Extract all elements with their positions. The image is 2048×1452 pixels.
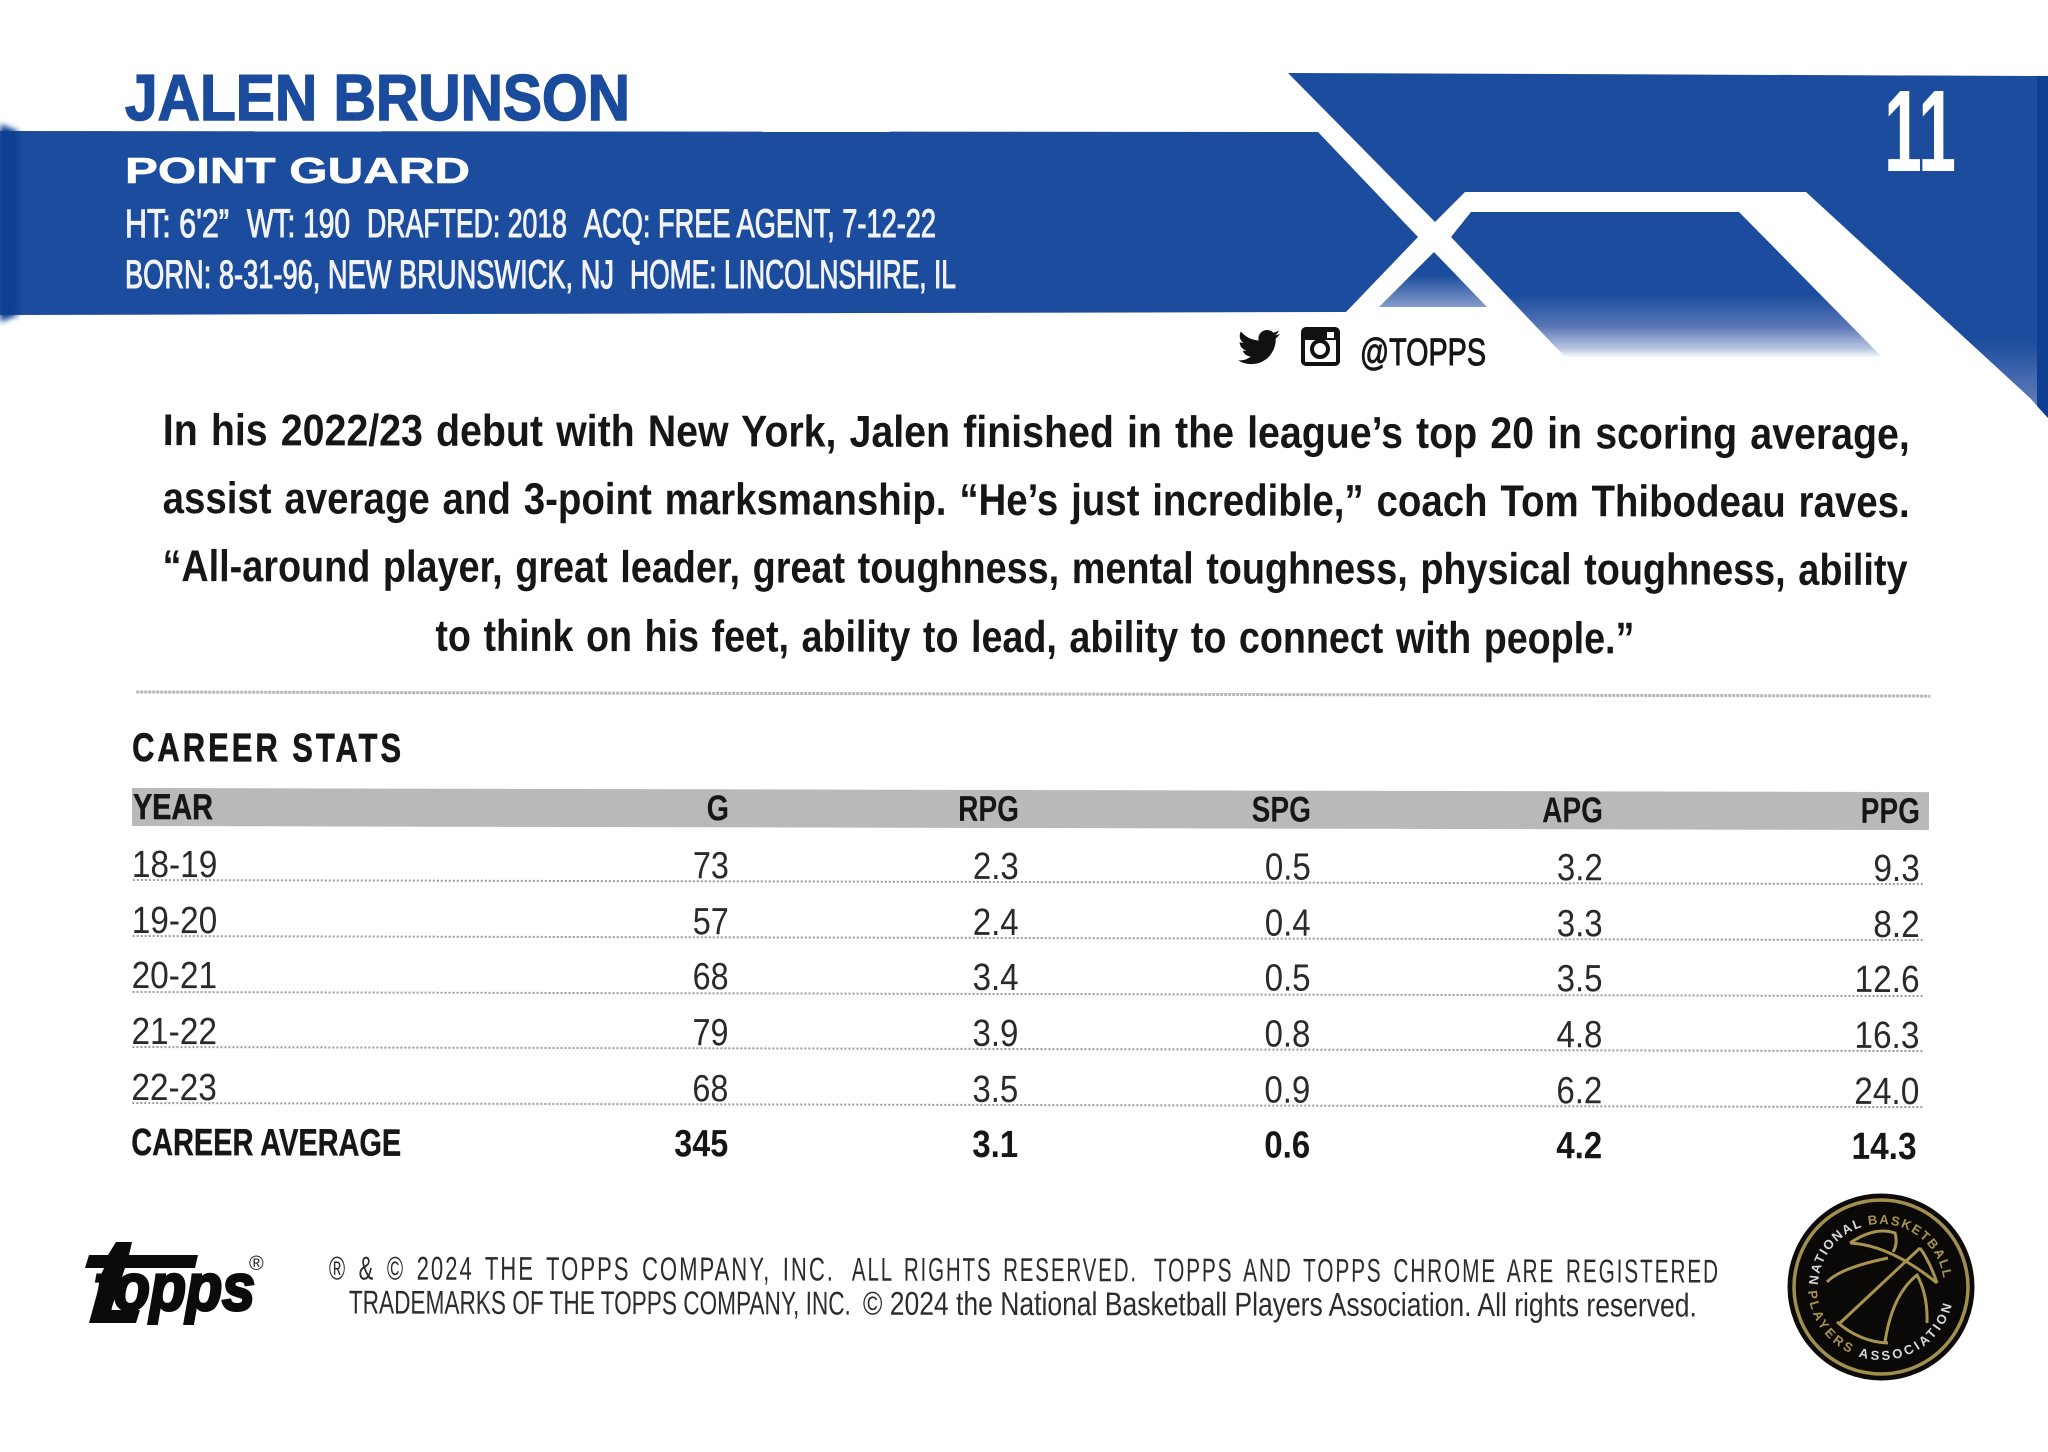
APG column: 4.8: [1556, 1013, 1603, 1056]
legal text: [329, 1249, 1720, 1324]
RPG column: 2.3: [973, 845, 1019, 888]
PPG column: 9.3: [1873, 847, 1920, 890]
G column: 73: [693, 845, 729, 887]
small triangle: [1379, 252, 1487, 307]
basketball lines: [1827, 1231, 1937, 1343]
bio line 1: HT: 6'2”: [125, 202, 229, 246]
stats table: [131, 786, 1929, 1168]
badge lettering: NATIONAL BASKETBALL: [1809, 1215, 1952, 1284]
logo: t letter bar, stem and foot: [85, 1242, 198, 1323]
legal text: ® & © 2024 THE TOPPS COMPANY, INC.: [329, 1249, 835, 1288]
year column: 19-20: [132, 899, 217, 942]
top-right blue shape: [1288, 73, 2048, 418]
career average label: CAREER AVERAGE: [131, 1122, 401, 1165]
player name: JALEN BRUNSON: [125, 61, 630, 134]
SPG column: 0.5: [1265, 845, 1311, 888]
G column: [674, 845, 729, 1165]
right dark edge: [2037, 76, 2048, 418]
topps logo: topps: [94, 1250, 255, 1324]
APG column: 3.3: [1557, 902, 1603, 945]
PPG column: 16.3: [1854, 1014, 1920, 1057]
RPG column: 3.1: [972, 1123, 1018, 1166]
SPG column: 0.5: [1265, 956, 1311, 999]
SPG column: 0.6: [1264, 1123, 1310, 1166]
header labels: APG: [1542, 790, 1603, 830]
bio line 1: WT: 190: [247, 202, 350, 246]
RPG column: 2.4: [973, 901, 1019, 944]
position: POINT GUARD: [125, 150, 470, 191]
G column: 68: [692, 1068, 728, 1110]
year column: 20-21: [132, 954, 217, 997]
players association badge: PLAYERS ASSOCIATION: [1808, 1290, 1952, 1360]
year column: [131, 843, 217, 1109]
header labels: [133, 786, 1920, 831]
G column: 79: [693, 1012, 729, 1054]
RPG column: [972, 845, 1019, 1166]
header labels: YEAR: [133, 786, 213, 827]
RPG column: 3.9: [972, 1012, 1019, 1055]
year column: 18-19: [132, 843, 217, 886]
RPG column: 3.5: [972, 1068, 1018, 1111]
legal text: ALL RIGHTS RESERVED.: [852, 1251, 1138, 1288]
APG column: 6.2: [1556, 1069, 1602, 1112]
players association badge: [1788, 1194, 1974, 1380]
header labels: PPG: [1861, 791, 1920, 831]
biography paragraph: to think on his feet, ability to lead, ability to connect with people.”: [435, 612, 1634, 663]
left dark edge: [0, 124, 18, 322]
APG column: 3.5: [1557, 957, 1603, 1000]
row rules: [132, 880, 1925, 1107]
card number: 11: [1884, 66, 1956, 196]
icon: instagram: [1303, 329, 1338, 364]
APG column: [1556, 846, 1603, 1167]
legal text: TRADEMARKS OF THE TOPPS COMPANY, INC.: [349, 1283, 851, 1322]
APG column: 4.2: [1556, 1124, 1602, 1167]
social handle: @TOPPS: [1360, 332, 1486, 374]
PPG column: 14.3: [1851, 1125, 1917, 1168]
table header bar: [132, 788, 1929, 830]
legal text: © 2024 the National Basketball Players Association. All rights reserved.: [863, 1285, 1697, 1324]
G column: 345: [674, 1123, 728, 1165]
header: blue band: [0, 73, 2048, 418]
bio line 2: BORN: 8-31-96, NEW BRUNSWICK, NJ: [125, 253, 614, 297]
G column: 57: [693, 901, 729, 943]
header labels: RPG: [958, 789, 1019, 829]
header labels: SPG: [1252, 789, 1311, 829]
PPG column: 24.0: [1854, 1070, 1919, 1113]
bio line 1: [125, 202, 936, 246]
PPG column: 8.2: [1873, 903, 1920, 946]
icon: twitter: [1238, 330, 1280, 364]
SPG column: [1264, 845, 1311, 1166]
stats heading: CAREER STATS: [132, 726, 404, 771]
biography paragraph: [162, 406, 1910, 664]
PPG column: [1851, 847, 1920, 1168]
year column: 21-22: [131, 1010, 217, 1053]
left blue band: [0, 131, 1418, 315]
topps logo: ®: [249, 1253, 264, 1275]
G column: 68: [693, 956, 729, 998]
header labels: G: [707, 787, 729, 828]
biography and stats content: [131, 406, 1931, 1324]
legal text: TOPPS AND TOPPS CHROME ARE REGISTERED: [1154, 1251, 1720, 1290]
bio line 1: ACQ: FREE AGENT, 7-12-22: [584, 202, 936, 246]
SPG column: 0.9: [1264, 1068, 1310, 1111]
year column: 22-23: [131, 1066, 217, 1109]
APG column: 3.2: [1557, 846, 1603, 889]
SPG column: 0.8: [1264, 1012, 1311, 1055]
bio line 2: HOME: LINCOLNSHIRE, IL: [630, 253, 956, 297]
SPG column: 0.4: [1265, 901, 1311, 944]
inner parallelogram: [1451, 212, 1882, 357]
bio line 1: DRAFTED: 2018: [367, 202, 567, 246]
PPG column: 12.6: [1854, 958, 1920, 1001]
RPG column: 3.4: [973, 956, 1019, 999]
